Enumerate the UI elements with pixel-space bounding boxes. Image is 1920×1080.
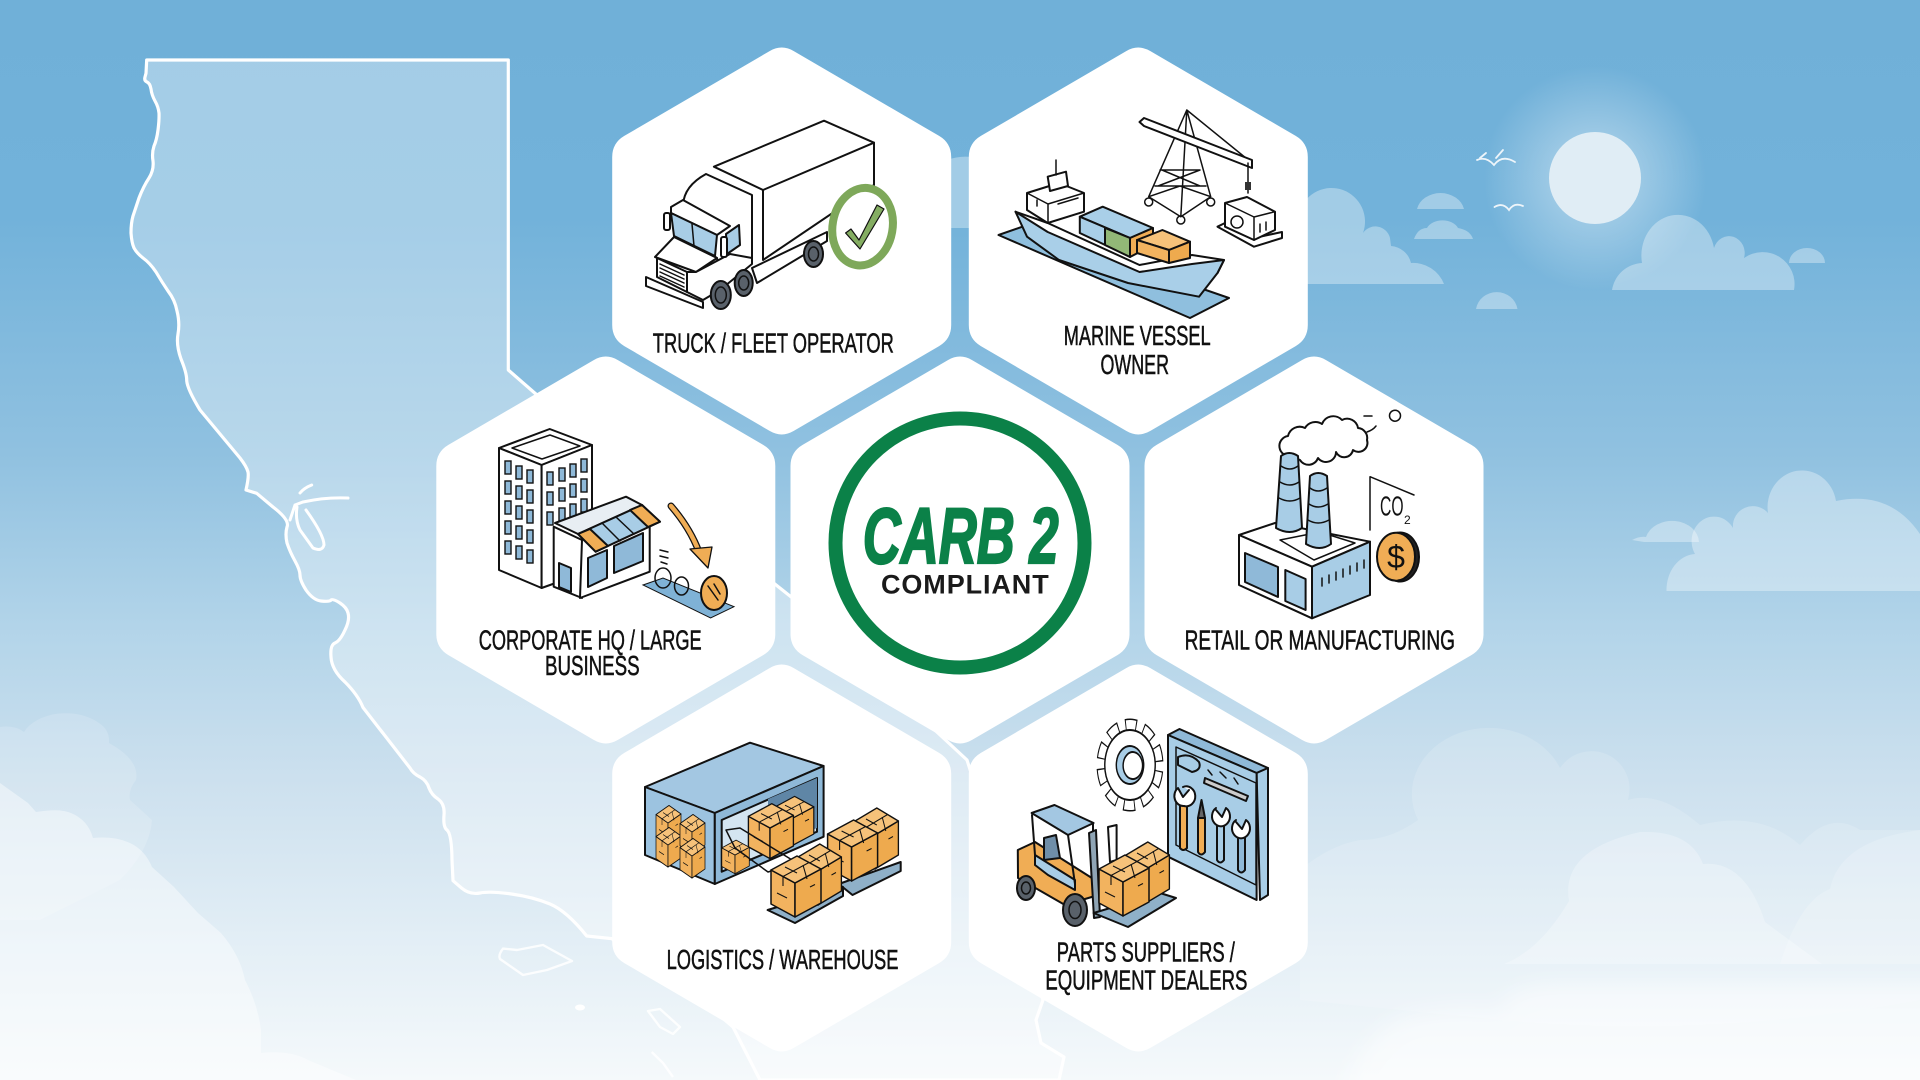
badge subtitle: COMPLIANT [881,569,1049,599]
channel islands [499,945,680,1077]
state fill and outline [131,60,1064,1080]
co2 label: CO [1380,490,1404,522]
panel: retail or manufacturing [1144,357,1484,743]
label [1064,320,1211,380]
icon: tool board [1168,729,1268,900]
background clouds lower left [0,713,356,1080]
label: LOGISTICS / WAREHOUSE [667,944,898,975]
label: BUSINESS [545,650,640,681]
panel: logistics / warehouse [612,665,951,1051]
label: OWNER [1100,349,1169,380]
birds [1477,150,1523,210]
panel: marine vessel owner [969,48,1308,434]
icon: warehouse with boxes [645,743,901,923]
label: PARTS SUPPLIERS / [1057,937,1235,968]
background clouds upper [930,157,1920,591]
bay area [290,485,348,549]
icon: forklift [1017,805,1176,927]
icon: gear [1099,722,1161,808]
icon: factory with co2 and coin [1239,410,1419,618]
panel: parts suppliers / equipment dealers [969,665,1308,1051]
panel: truck / fleet operator [612,48,951,434]
icon: ship and crane [998,110,1282,318]
label: RETAIL OR MANUFACTURING [1185,624,1455,655]
panel: carb 2 compliant badge [790,357,1130,743]
icon: factory with co2 and coin: 2 [1404,513,1411,527]
map of California [131,60,1064,1080]
label [479,624,702,681]
label [1045,937,1247,995]
panel: corporate hq / large business [436,357,775,743]
icon: office tower and storefront [499,429,734,618]
icon: truck with check [646,121,899,309]
coin symbol: $ [1387,539,1405,575]
badge title: CARB 2 [863,491,1059,580]
label: EQUIPMENT DEALERS [1045,964,1247,995]
green ring [836,418,1084,668]
label: CORPORATE HQ / LARGE [479,624,702,655]
label: TRUCK / FLEET OPERATOR [653,328,894,359]
label: MARINE VESSEL [1064,320,1211,351]
background clouds lower right [1300,728,1920,1080]
sun [1483,66,1707,290]
